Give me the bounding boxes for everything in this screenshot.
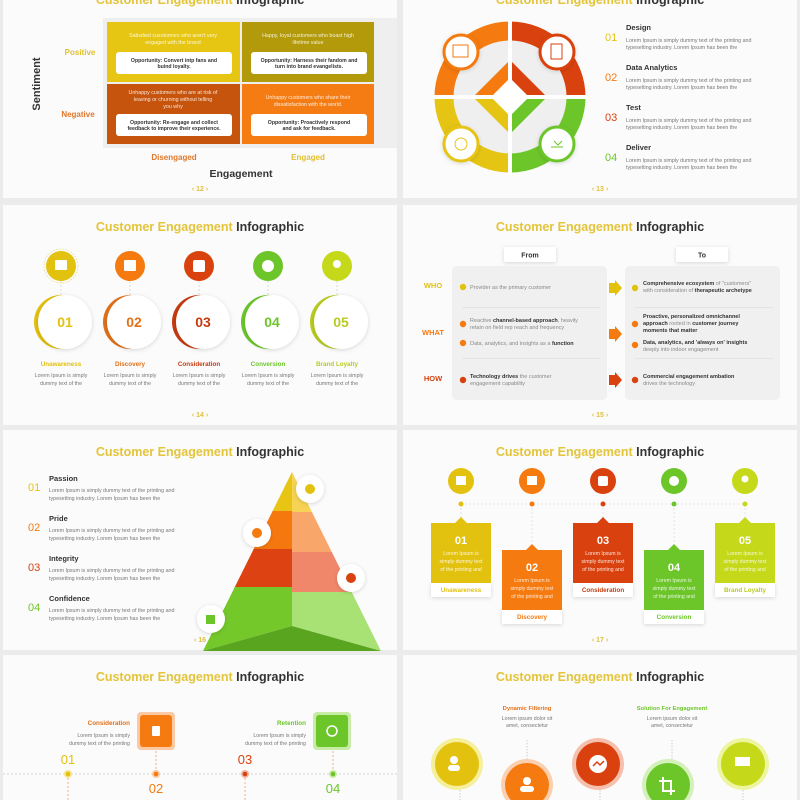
boxes: 02 [526, 562, 538, 574]
list: Lorem Ipsum is simply dummy text of the printing and [49, 488, 174, 494]
axis labels: Sentiment [31, 57, 43, 111]
from panel: Provider as the primary customer [470, 285, 551, 291]
timeline items: Lorem Ipsum is simply [77, 733, 130, 739]
boxes [431, 517, 775, 624]
node labels: Solution For Engagement [637, 706, 707, 712]
stage labels: Brand Loyalty [316, 361, 358, 368]
boxes: simply dummy text [724, 559, 767, 565]
list [28, 474, 174, 622]
icons [444, 35, 574, 161]
to panel: Proactive, personalized omnichannel [643, 314, 740, 320]
title: Customer Engagement Infographic [496, 445, 704, 459]
boxes: Lorem Ipsum is [514, 578, 550, 584]
steps list: typesetting industry. Lorem Ipsum has been the [626, 125, 737, 131]
boxes: 01 [455, 535, 467, 547]
boxes: of the printing and [582, 567, 624, 573]
matrix panel: Opportunity: Convert intp fans and [131, 58, 217, 64]
steps list: Lorem Ipsum is simply dummy text of the printing and [626, 118, 751, 124]
from panel: retain on field rep reach and frequency [470, 325, 564, 331]
matrix panel: you why [163, 104, 183, 110]
axis labels: Positive [65, 48, 96, 57]
to panel: moments that matter [643, 328, 698, 334]
stage labels: dummy text of the [40, 381, 82, 387]
stage labels: dummy text of the [316, 381, 358, 387]
stage labels: dummy text of the [178, 381, 220, 387]
list: typesetting industry. Lorem Ipsum has been the [49, 536, 160, 542]
steps list: Deliver [626, 143, 651, 152]
stage number circles: 04 [264, 314, 280, 330]
from panel: Reactive channel-based approach, heavily [470, 318, 578, 324]
slide 16: pyramid: ‹ 16 [194, 637, 206, 644]
boxes: of the printing and [440, 567, 482, 573]
title: Customer Engagement Infographic [96, 445, 304, 459]
list: Confidence [49, 594, 90, 603]
node labels: Dynamic Filtering [503, 706, 552, 712]
boxes: simply dummy text [582, 559, 625, 565]
to panel: Commercial engagement ambation [643, 374, 735, 380]
slide 17: stage boxes [403, 430, 797, 650]
timeline items: 02 [149, 781, 163, 796]
boxes: Lorem Ipsum is [443, 551, 479, 557]
matrix panel: leaving or churning without telling [134, 97, 212, 103]
row labels: WHAT [422, 328, 444, 337]
list: 04 [28, 602, 40, 614]
title: Customer Engagement Infographic [96, 220, 304, 234]
from panel: Technology drives the customer [470, 374, 552, 380]
timeline items: dummy text of the printing [245, 741, 306, 747]
slide 12: engagement matrix: ‹ 12 › [192, 186, 209, 193]
matrix panel [103, 18, 397, 148]
to panel: deeply into indoor engagement [643, 347, 719, 353]
list: typesetting industry. Lorem Ipsum has been the [49, 496, 160, 502]
boxes: 03 [597, 535, 609, 547]
list: Lorem Ipsum is simply dummy text of the printing and [49, 568, 174, 574]
slide 16: pyramid [3, 430, 397, 662]
boxes: Consideration [582, 587, 624, 594]
stage icons [44, 249, 352, 297]
stage number circles [34, 295, 368, 349]
stage number circles: 05 [333, 314, 349, 330]
stage labels: dummy text of the [247, 381, 289, 387]
list: 01 [28, 482, 40, 494]
stage labels: Lorem Ipsum is simply [35, 373, 88, 379]
steps list: typesetting industry. Lorem Ipsum has been the [626, 45, 737, 51]
slide 12: engagement matrix [3, 0, 397, 198]
axis labels: Disengaged [151, 153, 197, 162]
matrix panel: engaged with the brand [145, 40, 201, 46]
matrix panel: dissatisfaction with the world. [274, 102, 342, 108]
steps list: 01 [605, 32, 617, 44]
list: typesetting industry. Lorem Ipsum has been the [49, 576, 160, 582]
boxes: simply dummy text [511, 586, 554, 592]
slide 14: five stages circles [3, 205, 397, 425]
axis labels: Engagement [209, 168, 273, 180]
list: 02 [28, 522, 40, 534]
axis labels: Engaged [291, 153, 325, 162]
boxes: of the printing and [724, 567, 766, 573]
title: Customer Engagement Infographic [96, 670, 304, 684]
to panel: with consideration of therapeutic archetype [642, 288, 752, 294]
stage number circles: 03 [195, 314, 211, 330]
slide 13: cycle diagram: ‹ 13 › [592, 186, 609, 193]
stage labels: Lorem Ipsum is simply [311, 373, 364, 379]
timeline items: 03 [238, 752, 252, 767]
matrix panel: Satisdied cusotomers who aren't very [129, 33, 217, 39]
column headers: To [698, 252, 706, 260]
row labels: HOW [424, 374, 443, 383]
slide 19: circle nodes [403, 655, 797, 800]
list: typesetting industry. Lorem Ipsum has been the [49, 616, 160, 622]
stage labels: Conversion [251, 361, 285, 368]
column headers [504, 247, 728, 262]
node labels: Lorem ipsum dolor sit [647, 716, 698, 722]
boxes: of the printing and [653, 594, 695, 600]
list: Lorem Ipsum is simply dummy text of the printing and [49, 528, 174, 534]
boxes: Unawareness [441, 587, 482, 594]
timeline items: Retention [277, 720, 306, 727]
boxes: simply dummy text [440, 559, 483, 565]
timeline [448, 468, 758, 550]
node labels [460, 706, 743, 800]
stage labels: Lorem Ipsum is simply [242, 373, 295, 379]
column headers: From [521, 252, 539, 260]
from panel: Data, analytics, and insights as a function [470, 341, 574, 347]
matrix panel: turn into brand evangelists. [275, 64, 344, 70]
pyramid chart [196, 472, 381, 651]
axis labels: Negative [61, 110, 95, 119]
boxes: Discovery [517, 614, 548, 621]
stage labels: dummy text of the [109, 381, 151, 387]
timeline items: Consideration [88, 720, 130, 727]
matrix panel: Opportunity: Harness their fandom and [261, 58, 357, 64]
steps list: 03 [605, 112, 617, 124]
to panel: drives the technology [643, 381, 695, 387]
matrix panel: Unhappy customers who share their [266, 95, 351, 101]
steps list: Lorem Ipsum is simply dummy text of the printing and [626, 38, 751, 44]
title: Customer Engagement Infographic [496, 670, 704, 684]
to panel: Comprehensive ecosystem of "customers" [643, 281, 751, 287]
boxes: Lorem Ipsum is [727, 551, 763, 557]
list: Lorem Ipsum is simply dummy text of the printing and [49, 608, 174, 614]
list: Pride [49, 514, 68, 523]
stage labels: Unawareness [41, 361, 82, 368]
matrix panel: Opportunity: Re-engage and collect [130, 120, 218, 126]
steps list: Test [626, 103, 641, 112]
steps list: typesetting industry. Lorem Ipsum has been the [626, 85, 737, 91]
stage labels: Lorem Ipsum is simply [104, 373, 157, 379]
steps list: Lorem Ipsum is simply dummy text of the printing and [626, 78, 751, 84]
timeline items: 01 [61, 752, 75, 767]
list: 03 [28, 562, 40, 574]
boxes: 05 [739, 535, 751, 547]
to panel [625, 266, 780, 400]
steps list: 02 [605, 72, 617, 84]
stage labels: Lorem Ipsum is simply [173, 373, 226, 379]
to panel: approach rooted in customer journey [643, 321, 739, 327]
slide 14: five stages circles: ‹ 14 › [192, 412, 209, 419]
slide 13: cycle diagram [403, 0, 797, 198]
timeline items: dummy text of the printing [69, 741, 130, 747]
pyramid icons [197, 475, 365, 633]
row labels: WHO [424, 281, 442, 290]
node labels: amet, consectetur [506, 723, 548, 729]
steps list: Data Analytics [626, 63, 677, 72]
arrows [609, 280, 622, 388]
slide 15: from/to comparison [403, 205, 797, 425]
ring chart [432, 20, 588, 175]
boxes: Lorem Ipsum is [585, 551, 621, 557]
node labels: Lorem ipsum dolor sit [502, 716, 553, 722]
steps list: 04 [605, 152, 617, 164]
stage number circles: 02 [126, 314, 142, 330]
from panel: engagement capability [470, 381, 525, 387]
matrix panel: feedback to improve their experience. [127, 126, 221, 132]
stage labels [35, 361, 364, 387]
node labels: amet, consectetur [651, 723, 693, 729]
matrix panel: Unhappy customers who are at risk of [129, 90, 218, 96]
axis labels [31, 48, 325, 180]
timeline items: 04 [326, 781, 340, 796]
stage labels: Discovery [115, 361, 146, 368]
list: Passion [49, 474, 78, 483]
boxes: of the printing and [511, 594, 553, 600]
slide 17: stage boxes: ‹ 17 › [592, 637, 609, 644]
boxes: simply dummy text [653, 586, 696, 592]
stage number circles: 01 [57, 314, 73, 330]
steps list: Lorem Ipsum is simply dummy text of the printing and [626, 158, 751, 164]
from panel [452, 266, 607, 400]
steps list [605, 23, 751, 171]
matrix panel: and ask for feedback. [282, 126, 336, 132]
row labels [422, 281, 444, 383]
matrix panel: buind loyalty. [157, 64, 191, 70]
steps list: Design [626, 23, 651, 32]
boxes: 04 [668, 562, 681, 574]
title: Customer Engagement Infographic [496, 220, 704, 234]
slide 18: timeline [3, 655, 397, 800]
to panel: Data, analytics, and 'always on' insights [643, 340, 747, 346]
matrix panel: Happy, loyal customers who boast high [262, 33, 354, 39]
node circles [431, 738, 769, 800]
timeline items [3, 712, 397, 800]
matrix panel: lifetime value [293, 40, 324, 46]
stage labels: Consideration [178, 361, 220, 368]
boxes: Brand Loyalty [724, 587, 766, 594]
list: Integrity [49, 554, 79, 563]
slide 15: from/to comparison: ‹ 15 › [592, 412, 609, 419]
boxes: Conversion [657, 614, 691, 621]
timeline items: Lorem Ipsum is simply [253, 733, 306, 739]
boxes: Lorem Ipsum is [656, 578, 692, 584]
matrix panel: Opportunity: Proactively respond [268, 120, 350, 126]
steps list: typesetting industry. Lorem Ipsum has been the [626, 165, 737, 171]
